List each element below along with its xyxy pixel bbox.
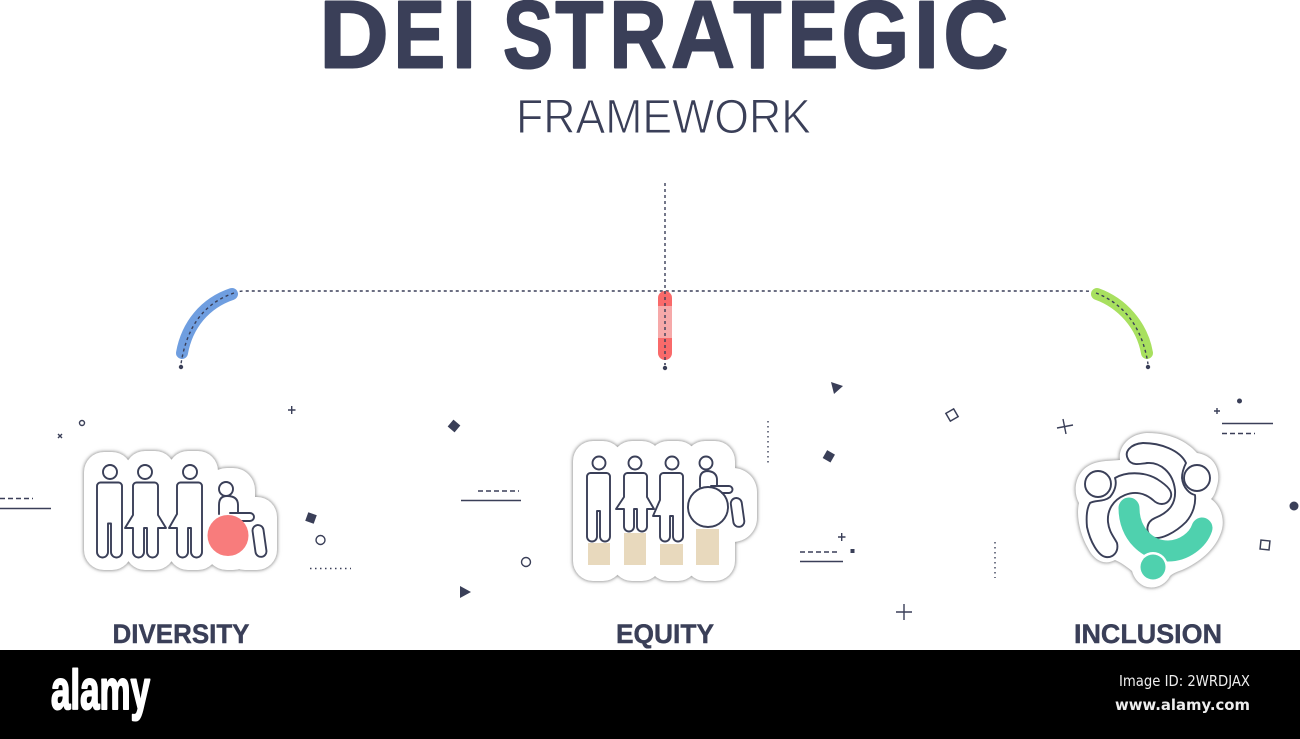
- label: diversity: DIVERSITY: [112, 619, 250, 649]
- logo: alamy: alamy: [51, 658, 150, 721]
- label: equity: EQUITY: [616, 619, 714, 649]
- icon: inclusion circle of people: [1076, 433, 1223, 588]
- decorative geometric accents: [0, 382, 1298, 620]
- website: www.alamy.com: [1115, 696, 1250, 714]
- connector: dashed tree lines: [234, 183, 1096, 365]
- subtitle: FRAMEWORK: [516, 91, 811, 144]
- icon: diversity people: [84, 451, 277, 570]
- image id: Image ID: 2WRDJAX: [1119, 672, 1250, 690]
- icon: equity people: [573, 441, 757, 581]
- arc: inclusion green: [1096, 293, 1150, 369]
- arc: diversity blue: [179, 293, 234, 369]
- label: inclusion: INCLUSION: [1074, 619, 1222, 649]
- footer band: [0, 650, 1300, 739]
- bar: equity red: [658, 291, 672, 370]
